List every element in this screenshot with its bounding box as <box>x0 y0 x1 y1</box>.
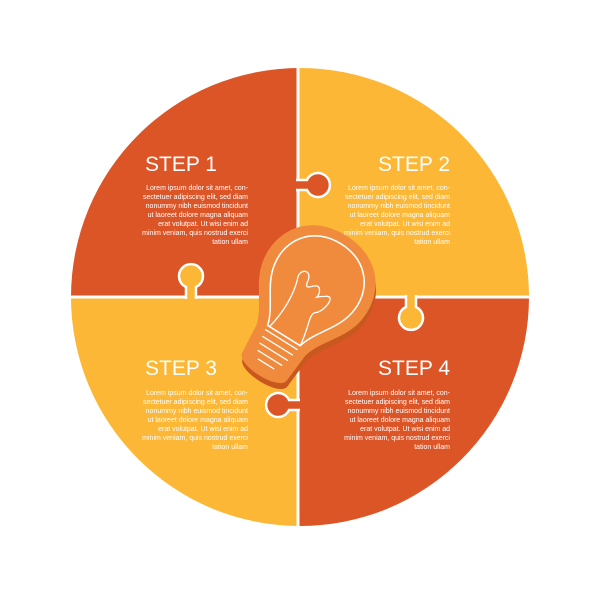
text block: step 2: nonummy nibh euismod tincidunt <box>348 203 450 210</box>
text block: step 3 <box>142 390 249 451</box>
text block: step 1: Lorem ipsum dolor sit amet, con- <box>146 185 249 192</box>
puzzle circle <box>71 68 529 526</box>
text block: step 3: Lorem ipsum dolor sit amet, con- <box>146 390 249 397</box>
panel: step 1 quadrant <box>60 60 298 297</box>
text block: step 2: ut laoreet dolore magna aliquam <box>350 212 450 219</box>
text block: step 2: erat volutpat. Ut wisi enim ad <box>360 221 450 228</box>
heading: step 1: STEP 1 <box>145 153 217 176</box>
text block: step 3: minim veniam, quis nostrud exerci <box>142 435 248 442</box>
text block: step 4: Lorem ipsum dolor sit amet, con- <box>348 390 451 397</box>
text block: step 4: sectetuer adipiscing elit, sed diam <box>345 399 450 406</box>
text block: step 3: sectetuer adipiscing elit, sed diam <box>143 399 248 406</box>
text block: step 3: tation ullam <box>212 444 248 451</box>
text block: step 3: ut laoreet dolore magna aliquam <box>148 417 248 424</box>
text block: step 4: erat volutpat. Ut wisi enim ad <box>360 426 450 433</box>
text block: step 2: tation ullam <box>414 239 450 246</box>
puzzle tab 4 <box>266 393 300 417</box>
panel: step 2 quadrant <box>298 68 529 296</box>
text block: step 4 <box>344 390 451 451</box>
text block: step 4: nonummy nibh euismod tincidunt <box>348 408 450 415</box>
text block: step 1: ut laoreet dolore magna aliquam <box>148 212 248 219</box>
text block: step 1: erat volutpat. Ut wisi enim ad <box>158 221 248 228</box>
icon: light bulb <box>207 205 399 412</box>
text block: step 1: minim veniam, quis nostrud exerci <box>142 230 248 237</box>
text block: step 2: Lorem ipsum dolor sit amet, con- <box>348 185 451 192</box>
text block: step 1 <box>142 185 249 246</box>
text block: step 2 <box>344 185 451 246</box>
text block: step 4: tation ullam <box>414 444 450 451</box>
heading: step 3: STEP 3 <box>145 357 217 380</box>
text block: step 3: nonummy nibh euismod tincidunt <box>146 408 248 415</box>
text block: step 2: sectetuer adipiscing elit, sed diam <box>345 194 450 201</box>
text block: step 3: erat volutpat. Ut wisi enim ad <box>158 426 248 433</box>
text block: step 4: minim veniam, quis nostrud exerci <box>344 435 450 442</box>
puzzle tab 3 <box>399 295 423 330</box>
puzzle tab 1 <box>296 173 330 197</box>
text block: step 2: minim veniam, quis nostrud exerci <box>344 230 450 237</box>
heading: step 2: STEP 2 <box>378 153 450 176</box>
text block: step 1: tation ullam <box>212 239 248 246</box>
panel: step 4 quadrant <box>298 298 529 526</box>
panel: step 3 quadrant <box>60 297 298 537</box>
text block: step 4: ut laoreet dolore magna aliquam <box>350 417 450 424</box>
text block: step 1: sectetuer adipiscing elit, sed diam <box>143 194 248 201</box>
heading: step 4: STEP 4 <box>378 357 450 380</box>
puzzle tab 2 <box>179 264 203 299</box>
text block: step 1: nonummy nibh euismod tincidunt <box>146 203 248 210</box>
